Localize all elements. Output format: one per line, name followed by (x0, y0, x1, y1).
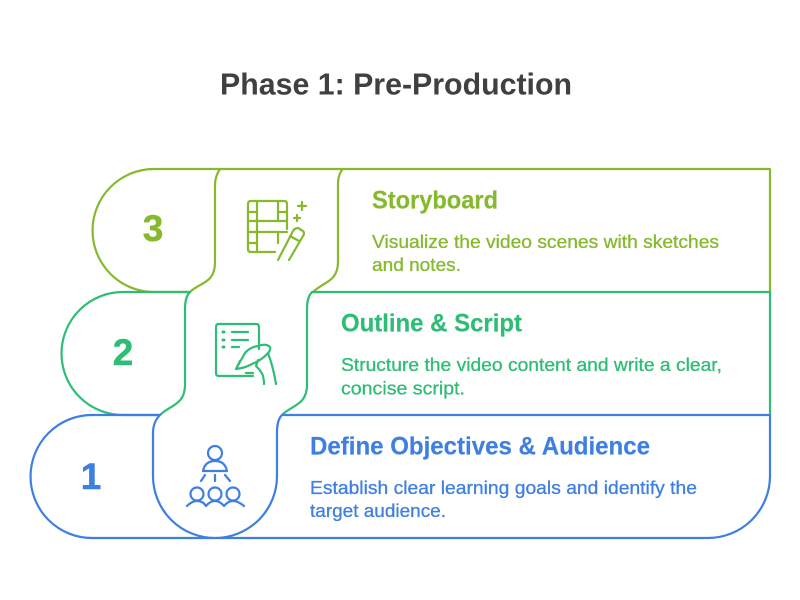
panel outline: step 2 (61, 292, 770, 415)
panel outline: step 3 (93, 169, 770, 292)
heading: Define Objectives & Audience: Define Objectives & Audience (310, 432, 650, 460)
panel: step 2 outline and script (61, 292, 770, 415)
description: Outline & Script: concise script. (341, 378, 465, 398)
panel outline: step 1 (31, 415, 770, 538)
panel: step 3 storyboard (93, 169, 770, 292)
description: Outline & Script: Structure the video content and write a clear, (341, 355, 722, 375)
step number 2: 2 (113, 332, 133, 373)
heading: Outline & Script: Outline & Script (341, 310, 523, 338)
icon: document and writing hand (216, 324, 276, 384)
description: Define Objectives & Audience: target audience. (310, 501, 446, 521)
step number 1: 1 (81, 456, 101, 497)
icon: presenter and audience (187, 446, 244, 506)
description: Define Objectives & Audience: Establish clear learning goals and identify the (310, 478, 697, 498)
panel: step 1 objectives and audience (31, 415, 770, 538)
description: Storyboard: Visualize the video scenes with sketches (372, 232, 719, 252)
description: Storyboard: and notes. (372, 255, 461, 275)
title: Phase 1: Pre-Production (220, 66, 572, 102)
heading: Storyboard: Storyboard (372, 186, 498, 214)
icon: film strip with wand (248, 201, 306, 260)
step number 3: 3 (143, 208, 163, 249)
